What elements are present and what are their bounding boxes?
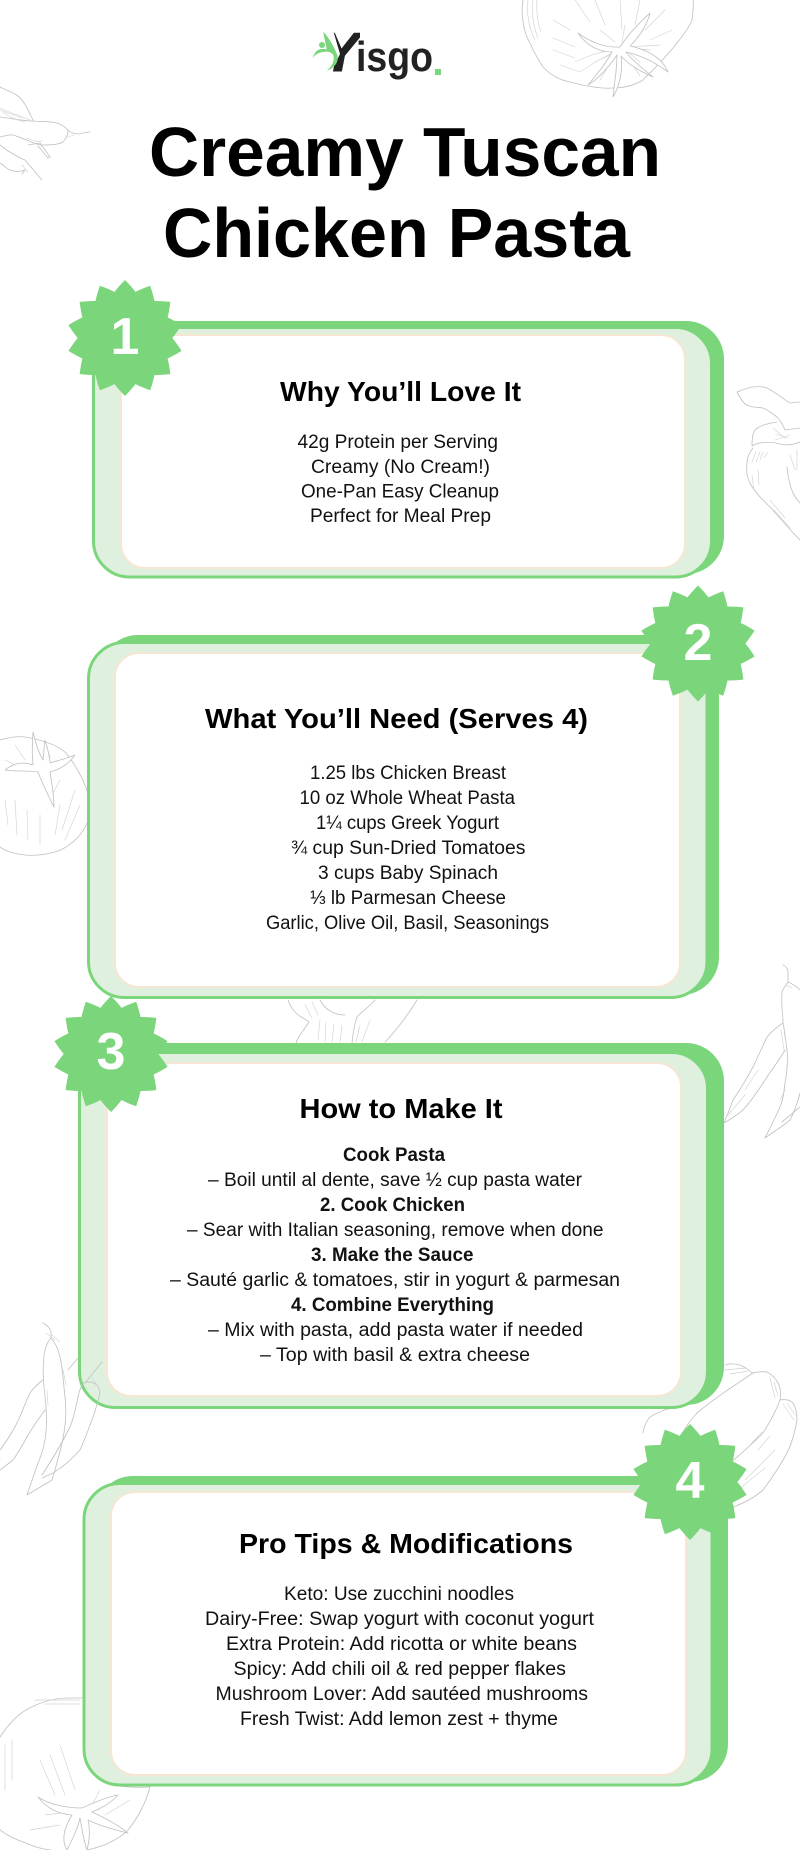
illustration: tomato top right: [522, 0, 693, 97]
heading: What You’ll Need (Serves 4): [205, 703, 588, 734]
number badge 2: [639, 586, 757, 702]
list: Spicy: Add chili oil & red pepper flakes: [234, 1659, 566, 1680]
illustration: beans top left: [0, 87, 90, 180]
list: 3 cups Baby Spinach: [318, 863, 498, 884]
illustration: pepper right: [737, 387, 800, 540]
list: Keto: Use zucchini noodles: [284, 1584, 514, 1605]
list: Creamy (No Cream!): [311, 457, 490, 478]
panel 2: what you'll need: [88, 586, 757, 998]
logo dot: [435, 69, 441, 75]
list: Perfect for Meal Prep: [310, 506, 491, 527]
panel 4: pro tips and modifications: [84, 1424, 749, 1785]
steps: [170, 1145, 620, 1366]
list: Extra Protein: Add ricotta or white beans: [226, 1634, 577, 1655]
list: Fresh Twist: Add lemon zest + thyme: [240, 1709, 558, 1730]
title: Creamy Tuscan: [149, 113, 661, 191]
illustration: beans lower left: [0, 1323, 102, 1495]
steps: – Boil until al dente, save ½ cup pasta water: [208, 1170, 583, 1191]
logo wordmark isgo: isgo: [356, 33, 433, 80]
illustration: tomato left: [0, 732, 90, 855]
list: Dairy-Free: Swap yogurt with coconut yogurt: [205, 1609, 595, 1630]
steps: – Sear with Italian seasoning, remove when done: [187, 1220, 604, 1241]
illustration: pepper centre: [288, 1000, 417, 1043]
heading: How to Make It: [300, 1093, 502, 1124]
illustration: pepper lower right: [643, 1364, 797, 1507]
title: [149, 113, 661, 272]
heading: Pro Tips & Modifications: [239, 1528, 573, 1559]
list: 42g Protein per Serving: [298, 432, 498, 453]
title: Chicken Pasta: [163, 194, 631, 272]
panel 3: how to make it: [52, 996, 724, 1408]
number badge 3: [52, 996, 170, 1112]
list: 10 oz Whole Wheat Pasta: [300, 788, 515, 809]
steps: – Mix with pasta, add pasta water if needed: [208, 1320, 583, 1341]
steps: – Top with basil & extra cheese: [260, 1345, 530, 1366]
illustration: beans right: [724, 965, 800, 1138]
list: Mushroom Lover: Add sautéed mushrooms: [216, 1684, 588, 1705]
list: ¾ cup Sun-Dried Tomatoes: [291, 838, 526, 859]
list: Garlic, Olive Oil, Basil, Seasonings: [266, 913, 549, 934]
logo figure icon: [313, 32, 338, 71]
list: One-Pan Easy Cleanup: [301, 482, 499, 502]
list: [266, 763, 549, 934]
steps: Cook Pasta: [343, 1145, 445, 1166]
steps: – Sauté garlic & tomatoes, stir in yogurt & parmesan: [170, 1270, 620, 1291]
illustration: tomato bottom left: [0, 1698, 150, 1850]
list: [298, 432, 499, 527]
number badge 2: 2: [684, 614, 712, 672]
number badge 1: 1: [111, 308, 139, 366]
number badge 4: [631, 1424, 749, 1540]
list: ⅓ lb Parmesan Cheese: [310, 888, 506, 909]
number badge 3: 3: [97, 1023, 125, 1081]
number badge 4: 4: [676, 1452, 705, 1510]
panel 1: why you'll love it: [66, 280, 724, 577]
list: 1.25 lbs Chicken Breast: [310, 763, 507, 784]
steps: 3. Make the Sauce: [311, 1245, 474, 1266]
list: [205, 1584, 595, 1730]
number badge 1: [66, 280, 184, 396]
steps: 4. Combine Everything: [291, 1295, 494, 1316]
list: 1¼ cups Greek Yogurt: [316, 813, 500, 834]
logo: [312, 32, 441, 80]
steps: 2. Cook Chicken: [320, 1195, 465, 1216]
logo wordmark Y: Y: [322, 21, 363, 83]
heading: Why You’ll Love It: [280, 376, 521, 407]
